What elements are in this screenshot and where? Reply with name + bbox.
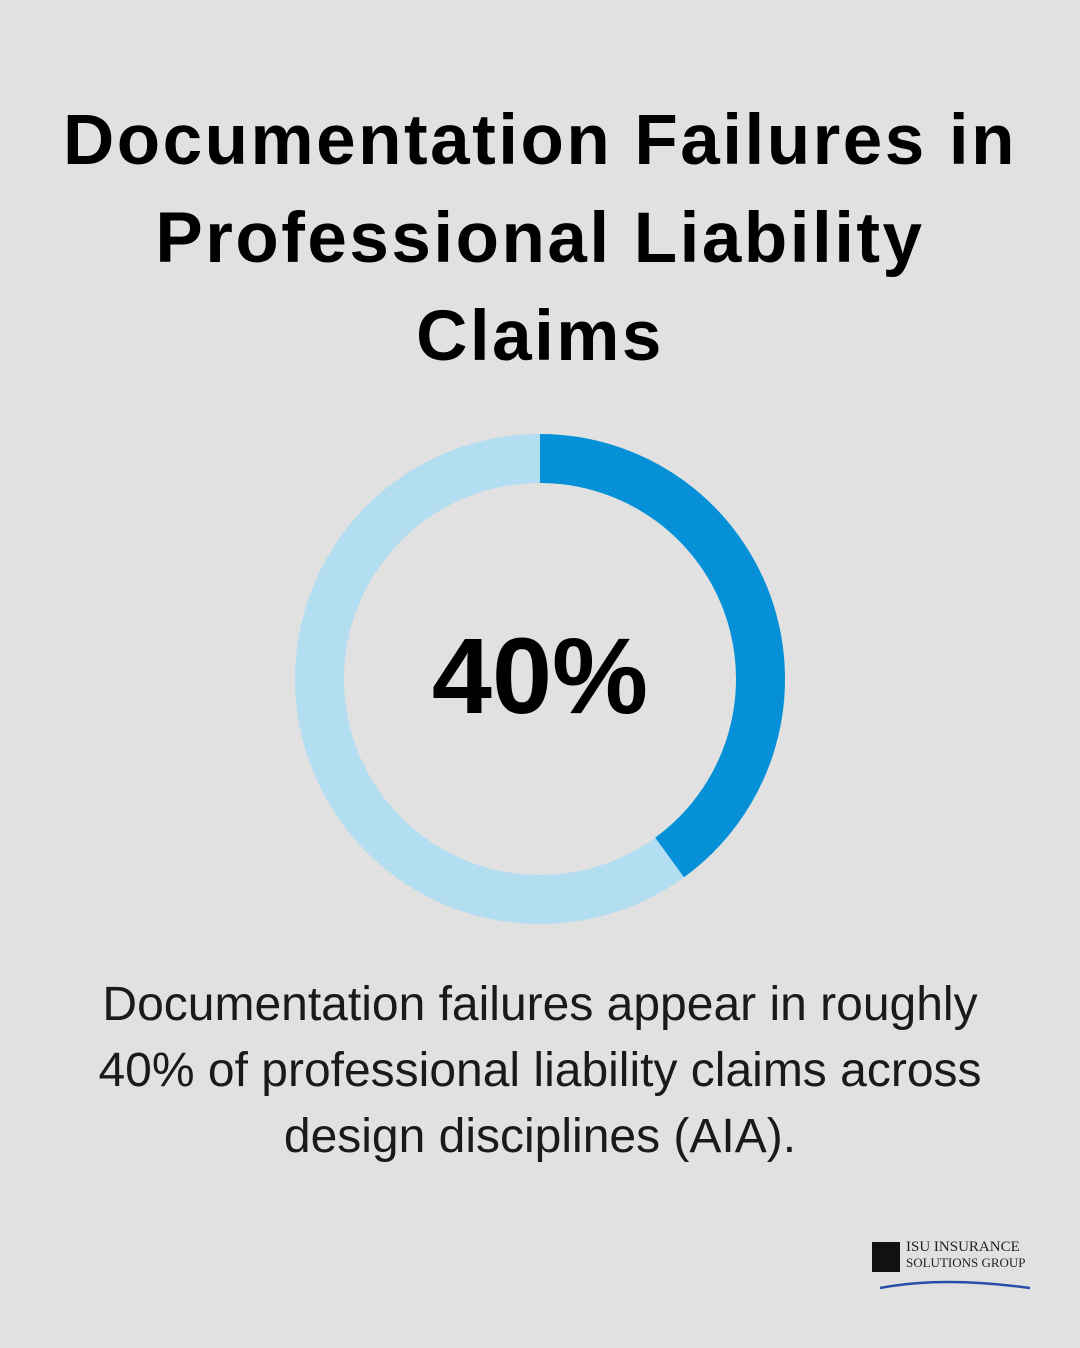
logo: SOLUTIONS GROUP	[906, 1255, 1026, 1270]
title	[63, 101, 1017, 376]
description: Documentation failures appear in roughly 40% of professional liability claims across design disciplines (AIA).	[98, 978, 982, 1163]
donut chart: 40%	[432, 615, 648, 736]
logo	[872, 1239, 1030, 1290]
title: Documentation Failures in	[63, 101, 1017, 180]
title: Professional Liability	[155, 199, 925, 278]
logo: ISU INSURANCE	[906, 1239, 1020, 1255]
title: Claims	[416, 297, 664, 376]
